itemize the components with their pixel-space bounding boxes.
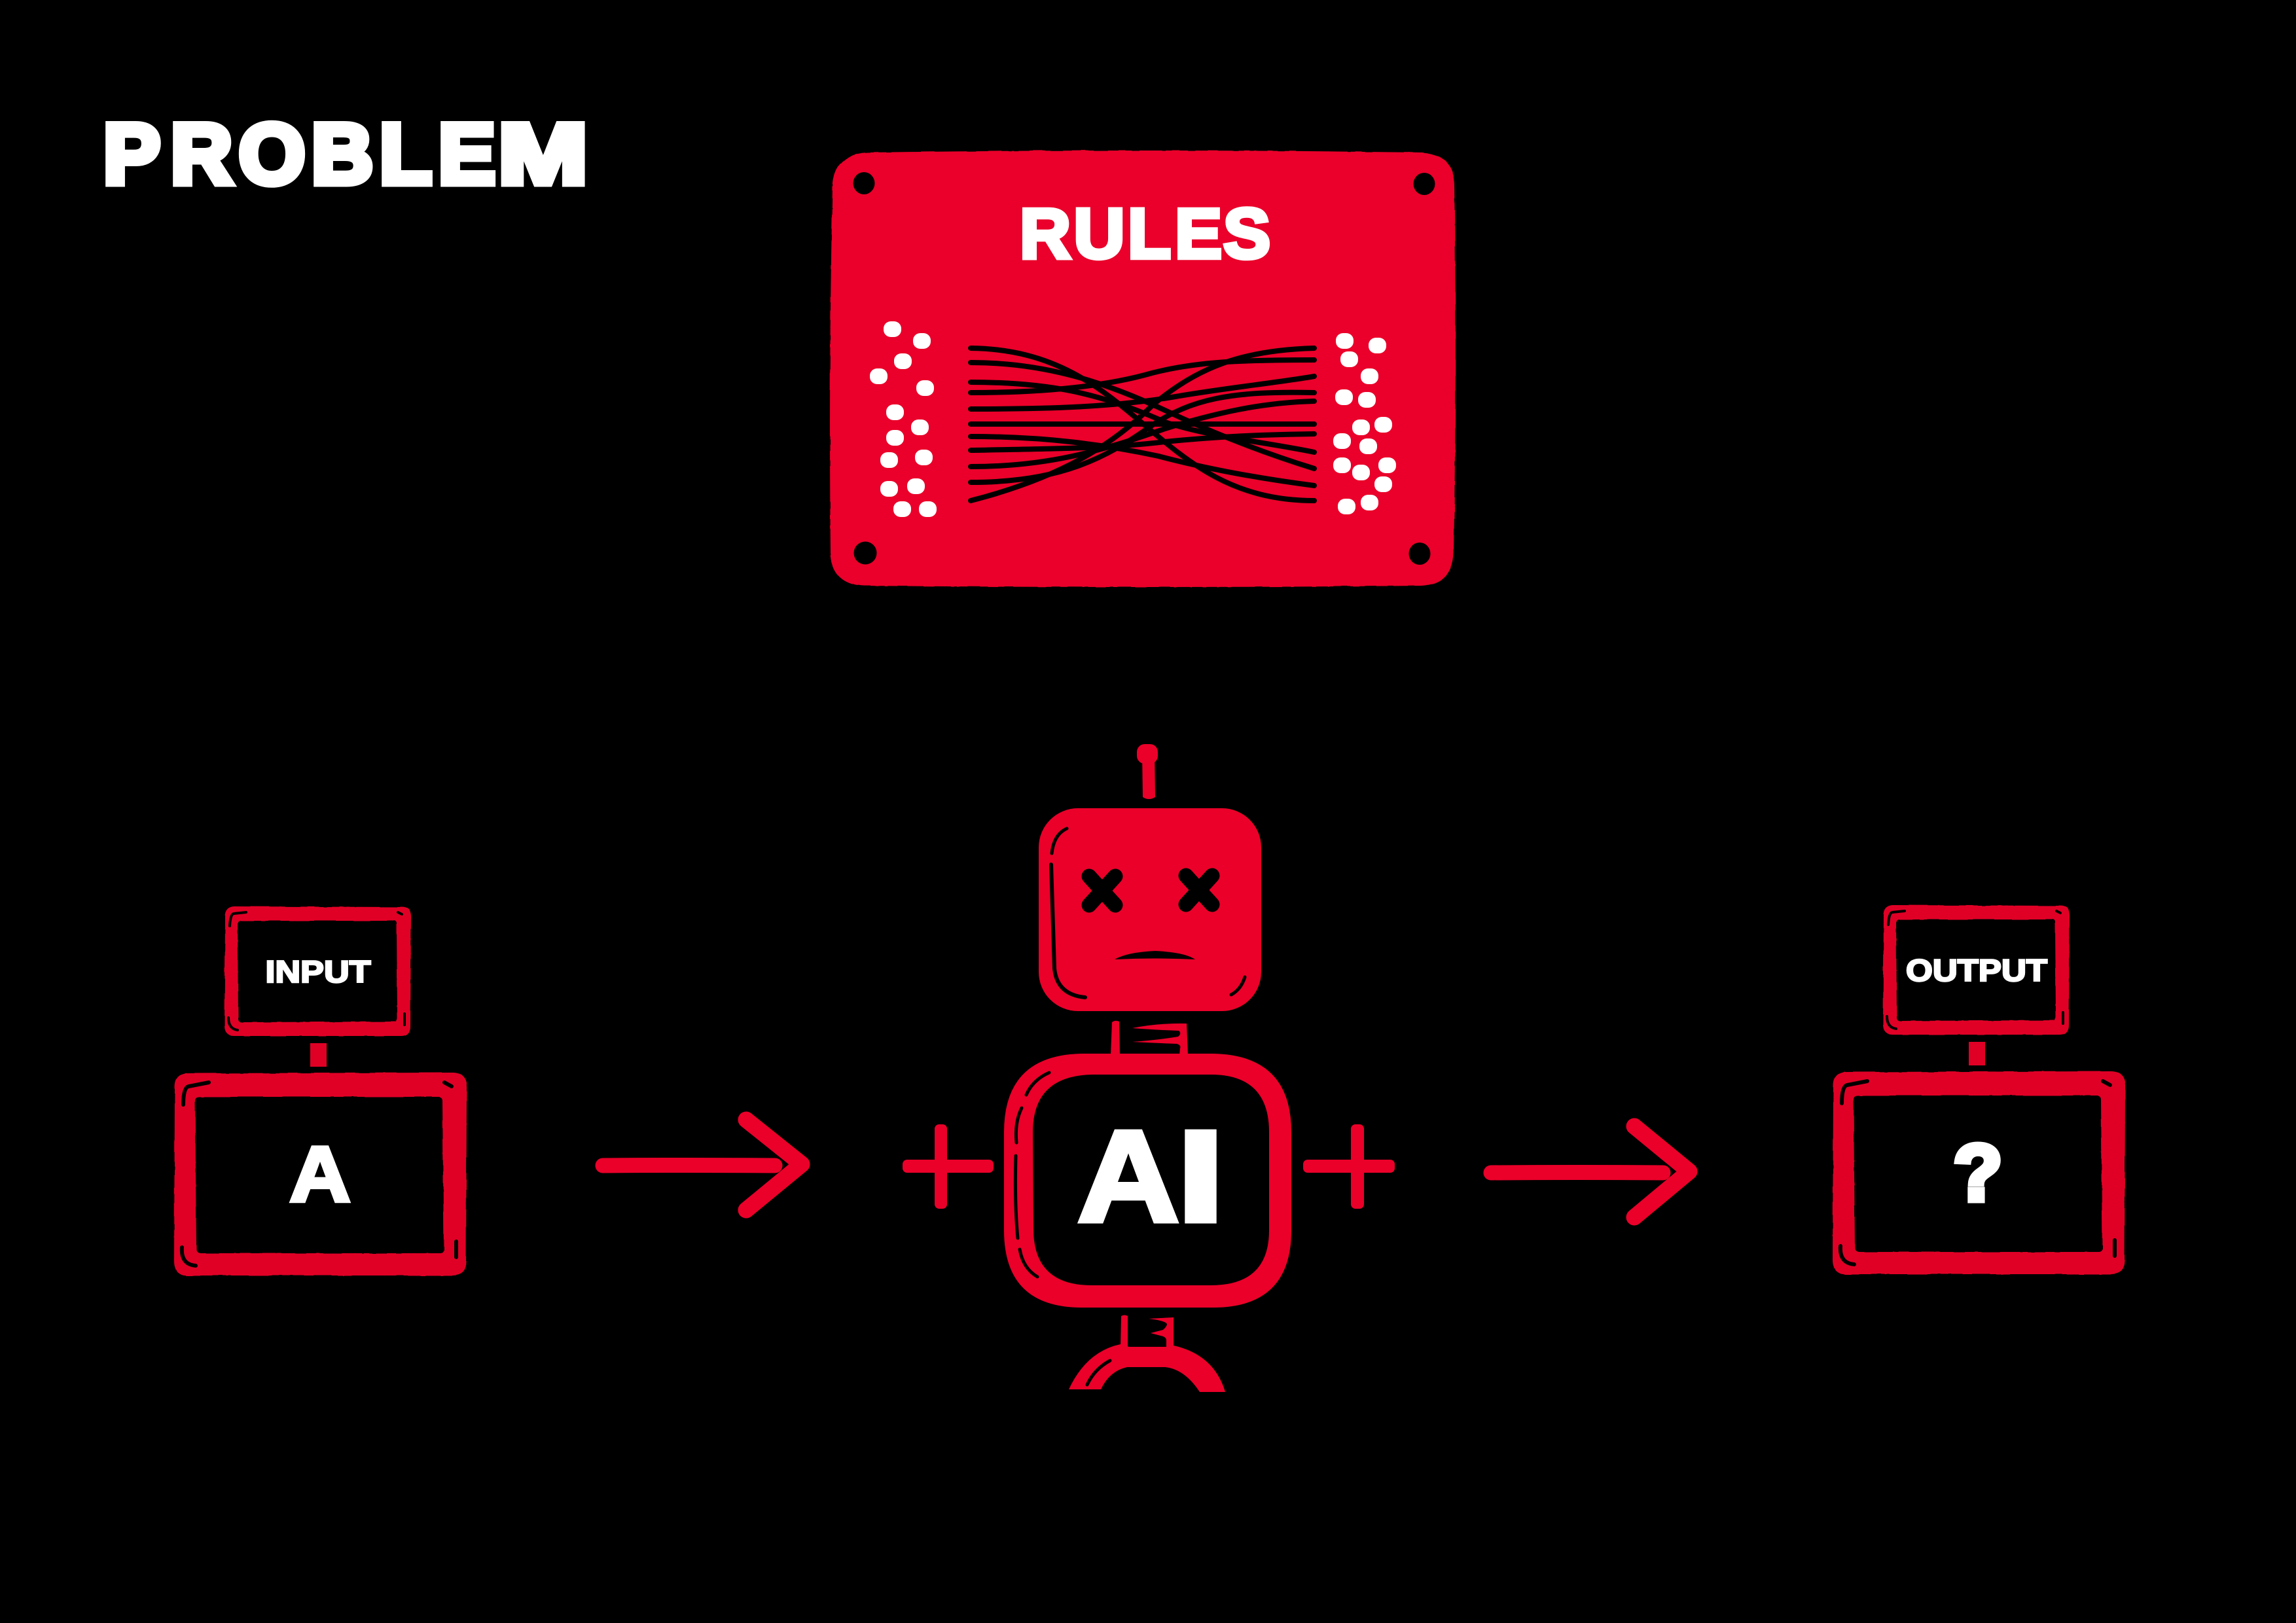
output monitor [1833,905,2125,1274]
title: M [499,106,588,202]
plus: right [1303,1124,1395,1209]
lower neck and base [1069,1315,1225,1392]
left dots [870,321,937,517]
input monitor [174,906,467,1275]
body highlights [1015,1073,1049,1277]
output frames [1833,905,2125,1274]
robot body [1004,1054,1291,1308]
value: question mark: ? [1954,1128,2002,1217]
mouth [1115,951,1195,959]
input frames [174,906,467,1275]
plus: left [903,1124,994,1209]
antenna [1137,744,1158,799]
screen label: AI: A [1077,1104,1179,1249]
title: PROBLE [103,106,495,202]
arrow: input to AI [603,1120,802,1210]
robot [903,744,1395,1392]
right dots [1333,333,1396,514]
arrow: AI to output [1491,1126,1689,1217]
label: output: OUTPUT [1906,953,2047,988]
value: A: A [289,1131,351,1219]
screen label: AI: I [1176,1104,1225,1249]
mounting holes [853,172,1435,565]
label: input: INPUT [266,954,371,989]
head highlights [1051,829,1245,997]
X eyes [1089,876,1212,905]
input frame highlights [182,912,456,1266]
base highlight [1087,1361,1110,1385]
upper neck [1111,1021,1188,1055]
tangled rule lines [971,348,1314,501]
heading: rules: RULES [1020,194,1270,273]
robot head [1039,808,1261,1011]
panel: rules [830,151,1456,587]
output frame highlights [1840,911,2115,1264]
panel background [830,151,1456,587]
